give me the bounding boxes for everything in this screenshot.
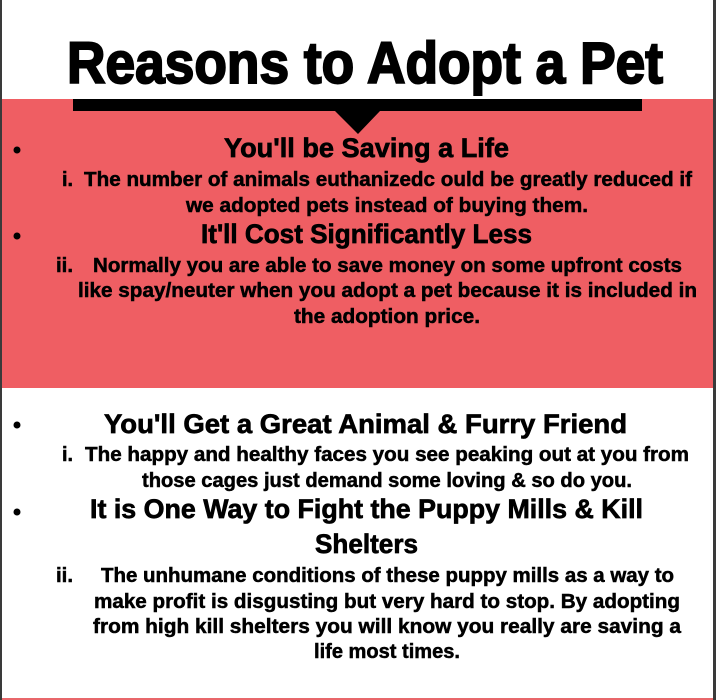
right page border — [713, 0, 716, 700]
bottom red edge — [0, 698, 716, 700]
body text — [56, 255, 697, 328]
body text: like spay/neuter when you adopt a pet because it is included in — [78, 280, 697, 302]
left page border — [0, 0, 2, 700]
bullet — [14, 508, 20, 516]
body text: The number of animals euthanizedc ould be greatly reduced if — [84, 169, 692, 191]
section: puppy mills — [14, 494, 682, 663]
bullet — [14, 232, 20, 240]
body text: ii. — [56, 255, 73, 277]
heading — [90, 494, 643, 559]
section: saving a life — [14, 133, 692, 217]
body text: we adopted pets instead of buying them. — [185, 195, 588, 217]
body text: ii. — [56, 565, 73, 587]
body text: make profit is disgusting but very hard to stop. By adopting — [94, 591, 680, 613]
panel: red band — [0, 99, 716, 388]
body text: those cages just demand some loving & so do you. — [142, 470, 632, 492]
body text: i. — [62, 169, 73, 191]
title: Reasons to Adopt a Pet — [67, 31, 663, 96]
body text: i. — [62, 444, 73, 466]
heading: You'll be Saving a Life — [224, 133, 509, 163]
body text: the adoption price. — [294, 306, 480, 328]
heading: You'll Get a Great Animal & Furry Friend — [104, 409, 627, 439]
body text: The happy and healthy faces you see peaking out at you from — [85, 444, 689, 466]
bullet — [14, 422, 20, 428]
heading: Shelters — [315, 529, 418, 559]
body text: The unhumane conditions of these puppy mills as a way to — [101, 565, 674, 587]
heading: It is One Way to Fight the Puppy Mills & Kill — [90, 494, 643, 524]
body text: from high kill shelters you will know you really are saving a — [93, 616, 682, 638]
section: great animal — [14, 409, 689, 492]
body text — [62, 444, 689, 492]
heading: It'll Cost Significantly Less — [201, 219, 532, 249]
body text: life most times. — [314, 641, 460, 663]
body text — [62, 169, 692, 217]
section: cost less — [14, 219, 697, 328]
bullet — [14, 146, 20, 154]
body text — [56, 565, 682, 663]
body text: Normally you are able to save money on some upfront costs — [93, 255, 682, 277]
title banner with pointer — [73, 99, 642, 134]
